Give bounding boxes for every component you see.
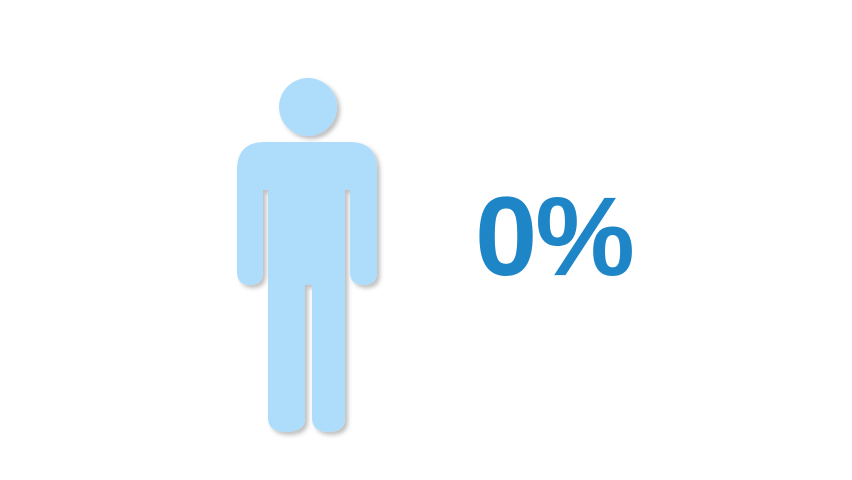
percentage text: 0% (475, 174, 633, 299)
body (237, 142, 377, 432)
head (279, 78, 337, 136)
